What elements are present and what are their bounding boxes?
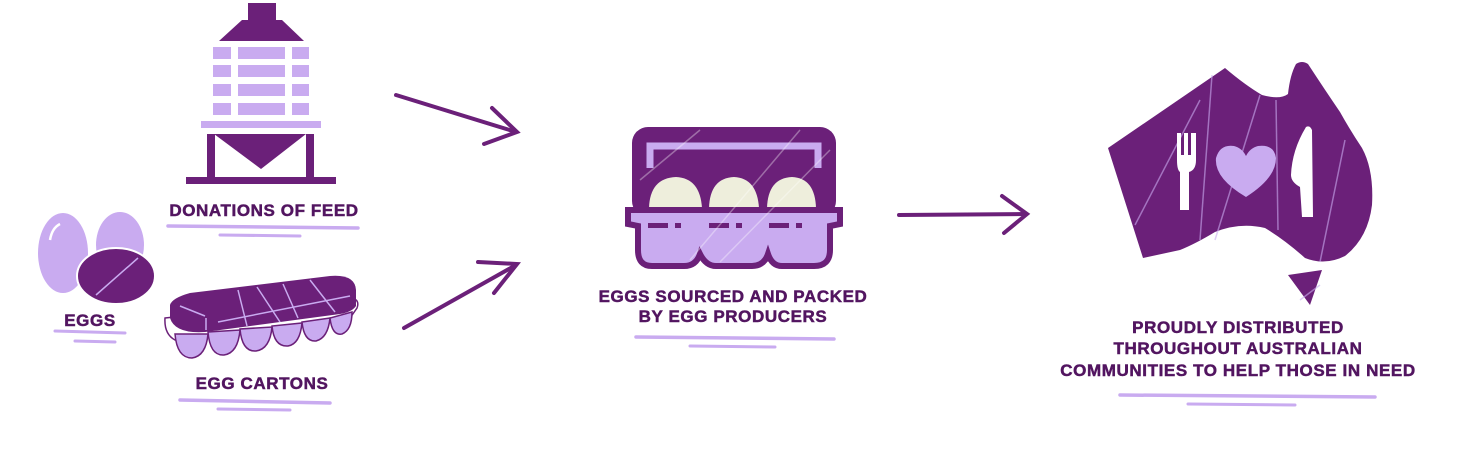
heading: eggs sourced [599,287,867,326]
heading: proudly distributed [1060,318,1416,380]
heading: eggs sourced: EGGS SOURCED AND PACKED [599,287,867,306]
icon: egg box with eggs [628,127,840,266]
heading: egg cartons: EGG CARTONS [196,374,328,393]
underline: eggs [55,331,125,342]
arrow: feed to producers [396,95,517,144]
icon: feed silo [186,3,336,184]
arrow: cartons to producers [404,262,517,328]
underline: feed [168,226,358,236]
heading: proudly distributed: COMMUNITIES TO HELP THOSE IN NEED [1060,361,1416,380]
underline: cartons [180,400,330,410]
underline: producers [636,337,834,347]
heading: donations of feed: DONATIONS OF FEED [169,201,359,220]
heading: eggs: EGGS [64,311,116,330]
icon: egg carton [165,276,358,358]
heading: proudly distributed: PROUDLY DISTRIBUTED [1132,318,1344,337]
icon: australia map with fork heart knife [1108,62,1372,305]
heading: proudly distributed: THROUGHOUT AUSTRALIAN [1113,339,1363,358]
arrow: producers to communities [899,196,1027,233]
icon: eggs [38,212,155,304]
heading: eggs sourced: BY EGG PRODUCERS [639,307,827,326]
underline: communities [1120,395,1375,405]
